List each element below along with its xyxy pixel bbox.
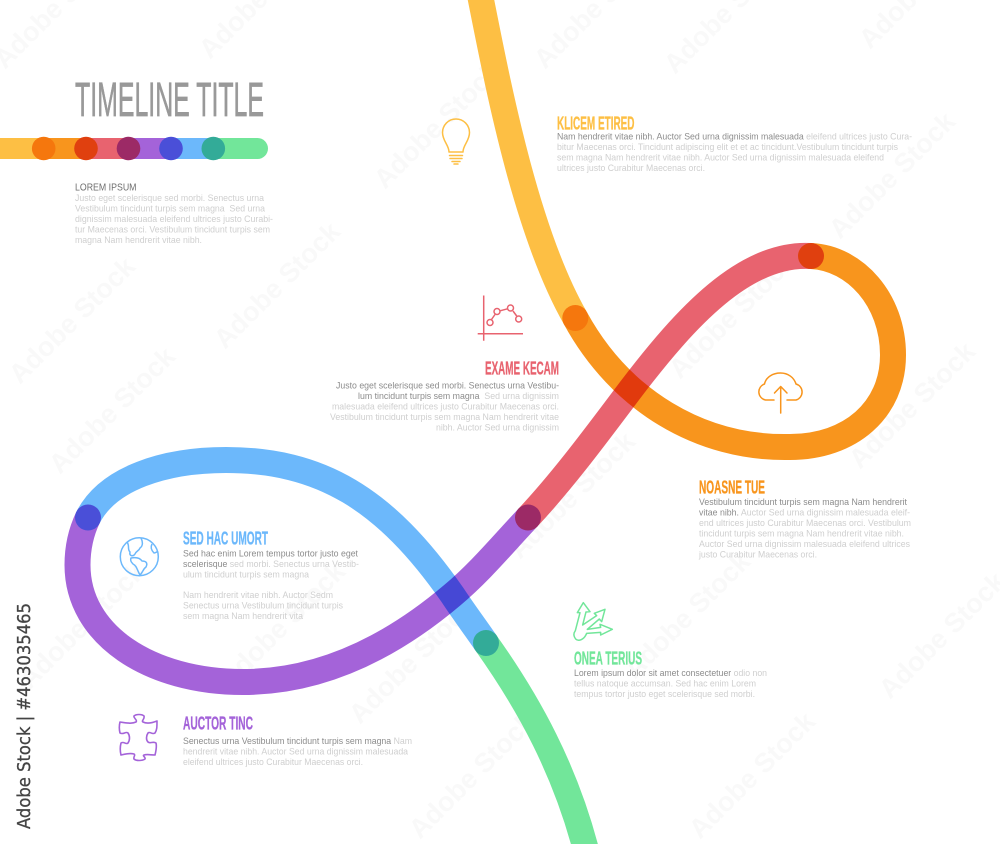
body bbox=[557, 132, 912, 173]
background watermarks: Adobe Stock bbox=[368, 56, 507, 194]
body: lum tincidunt turpis sem magna Sed urna dignissim bbox=[358, 391, 559, 401]
body bbox=[574, 668, 767, 699]
body: Senectus urna Vestibulum tincidunt turpis bbox=[183, 600, 343, 610]
intro text block: dignissim malesuada eleifend ultrices justo Curabi- bbox=[75, 214, 273, 224]
body: tempus tortor justo eget scelerisque sed morbi. bbox=[574, 689, 755, 699]
heading: EXAME KECAM bbox=[485, 358, 559, 378]
body: Lorem ipsum dolor sit amet consectetuer odio non bbox=[574, 668, 767, 678]
segment: blue bbox=[88, 460, 486, 643]
intro text block: tur Maecenas orci. Vestibulum tincidunt turpis sem bbox=[75, 224, 270, 234]
body bbox=[183, 736, 412, 767]
icon: cloud upload bbox=[759, 373, 802, 413]
background watermarks: Adobe Stock bbox=[618, 546, 757, 684]
intro text block: Justo eget scelerisque sed morbi. Senectus urna bbox=[75, 193, 265, 203]
text block: noasne tue bbox=[698, 478, 911, 560]
heading: NOASNE TUE bbox=[699, 478, 765, 498]
heading: AUCTOR TINC bbox=[183, 714, 253, 734]
background watermarks: Adobe Stock bbox=[343, 591, 482, 729]
background watermarks: Adobe Stock bbox=[843, 336, 982, 474]
body: ultrices justo Curabitur Maecenas orci. bbox=[557, 163, 705, 173]
background watermarks: Adobe Stock bbox=[213, 556, 352, 694]
body: Nam hendrerit vitae nibh. Auctor Sedm bbox=[183, 590, 333, 600]
segment: red bbox=[528, 256, 811, 518]
heading: ONEA TERIUS bbox=[574, 648, 642, 668]
body: bitur Maecenas orci. Tincidunt adipiscing elit et et ac tincidunt.Vestibulum tincidunt turpis bbox=[557, 142, 898, 152]
body: vitae nibh. Auctor Sed urna dignissim malesuada eleif- bbox=[699, 508, 910, 518]
intro text block: magna Nam hendrerit vitae nibh. bbox=[75, 235, 202, 245]
background watermarks: Adobe Stock bbox=[13, 556, 152, 694]
background watermarks: Adobe Stock bbox=[3, 251, 142, 389]
body: malesuada eleifend ultrices justo Curabitur Maecenas orci. bbox=[332, 402, 559, 412]
body: tellus natoque accumsan. Sed hac enim Lorem bbox=[574, 678, 756, 688]
body: Auctor Sed urna dignissim malesuada eleifend ultrices bbox=[699, 539, 910, 549]
background watermarks: Adobe Stock bbox=[208, 216, 347, 354]
body: sem magna Nam hendrerit vitae nibh. Auctor Sed urna dignissim malesuada eleifend bbox=[557, 152, 884, 162]
background watermarks: Adobe Stock bbox=[43, 341, 182, 479]
text block: exame kecam bbox=[330, 358, 559, 432]
background watermarks: Adobe Stock bbox=[403, 706, 542, 844]
icon: line chart bbox=[478, 296, 523, 341]
intro text block bbox=[75, 182, 273, 245]
intro text block: LOREM IPSUM bbox=[75, 182, 136, 194]
segment: purple bbox=[78, 518, 528, 682]
body: hendrerit vitae nibh. Auctor Sed urna dignissim malesuada bbox=[183, 746, 409, 756]
body: Justo eget scelerisque sed morbi. Senectus urna Vestibu- bbox=[336, 380, 559, 390]
body: ulum tincidunt turpis sem magna bbox=[183, 570, 310, 580]
segment: yellow bbox=[480, 0, 575, 318]
body: end ultrices justo Curabitur Maecenas orci. Vestibulum bbox=[699, 518, 911, 528]
background watermarks: Adobe Stock bbox=[683, 706, 822, 844]
body bbox=[183, 548, 359, 621]
text block: auctor tinc bbox=[183, 714, 412, 767]
body: tincidunt turpis sem magna Nam hendrerit vitae nibh. bbox=[699, 528, 904, 538]
icon: branching arrows bbox=[574, 603, 612, 640]
title: TIMELINE TITLE bbox=[75, 74, 264, 127]
background watermarks: Adobe Stock bbox=[663, 246, 802, 384]
icon: light bulb bbox=[442, 119, 470, 164]
icon: globe bbox=[120, 538, 158, 576]
body: eleifend ultrices justo Curabitur Maecenas orci. bbox=[183, 757, 363, 767]
segment: green bbox=[486, 643, 586, 844]
body: nibh. Auctor Sed urna dignissim bbox=[436, 422, 559, 432]
icon: puzzle piece bbox=[119, 714, 157, 760]
background watermarks: Adobe Stock bbox=[823, 106, 962, 244]
body: Senectus urna Vestibulum tincidunt turpis sem magna Nam bbox=[183, 736, 412, 746]
body bbox=[698, 497, 911, 560]
stock id vertical text: Adobe Stock | #463035465 bbox=[14, 603, 35, 829]
body: Sed hac enim Lorem tempus tortor justo eget bbox=[183, 548, 358, 558]
body bbox=[330, 380, 559, 432]
intro text block: Vestibulum tincidunt turpis sem magna Sed urna bbox=[75, 204, 266, 214]
text block: klicem etired bbox=[557, 113, 912, 173]
body: justo Curabitur Maecenas orci. bbox=[698, 550, 817, 560]
body: Vestibulum tincidunt turpis sem magna Nam hendrerit bbox=[699, 497, 907, 507]
body: Nam hendrerit vitae nibh. Auctor Sed urna dignissim malesuada eleifend ultrices justo Cura- bbox=[557, 132, 912, 142]
timeline dots bbox=[75, 243, 824, 656]
text block: onea terius bbox=[574, 648, 767, 699]
heading: SED HAC UMORT bbox=[183, 528, 268, 548]
body: sem magna Nam hendrerit vita bbox=[183, 611, 304, 621]
heading: KLICEM ETIRED bbox=[557, 113, 634, 133]
text block: sed hac umort bbox=[183, 528, 359, 621]
mini timeline bar bbox=[0, 137, 268, 160]
background watermarks: Adobe Stock bbox=[503, 426, 642, 564]
segment: orange bbox=[575, 256, 893, 447]
body: scelerisque sed morbi. Senectus urna Vestib- bbox=[183, 559, 359, 569]
body: Vestibulum tincidunt turpis sem magna Nam hendrerit vitae bbox=[330, 412, 559, 422]
